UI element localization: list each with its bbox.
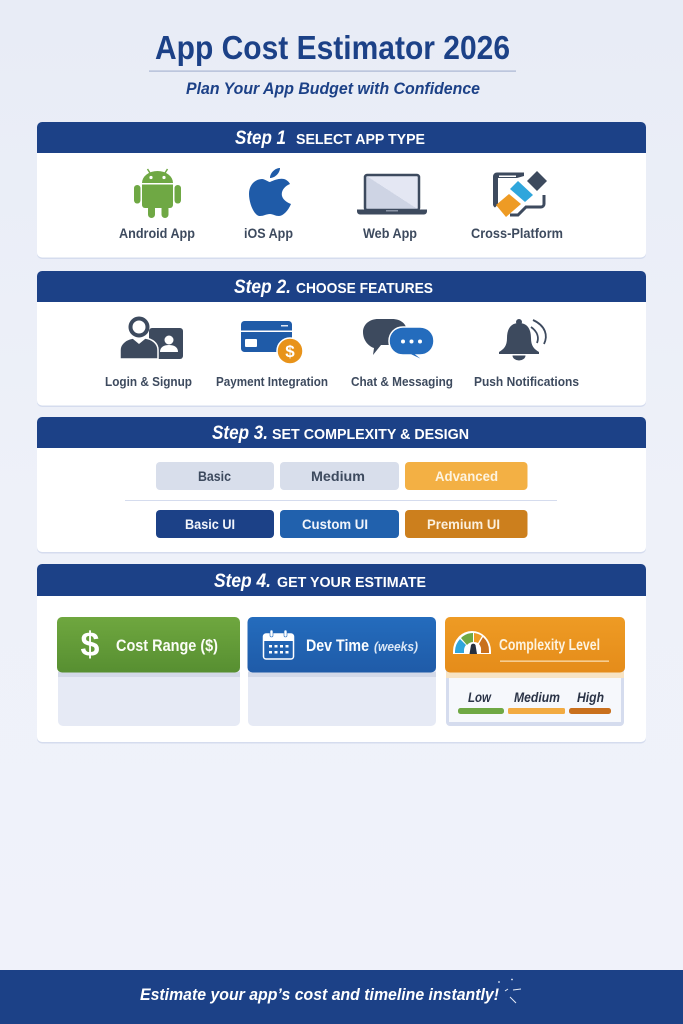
- icon: sparkle: [498, 979, 521, 1003]
- card: complexity level: Complexity Level: [499, 637, 600, 654]
- icon: payment card: [241, 321, 303, 364]
- card: dev time: Dev Time: [306, 636, 369, 655]
- label: ios app: iOS App: [244, 225, 293, 241]
- card: dev time: [248, 617, 436, 726]
- label: web app: Web App: [363, 225, 417, 241]
- icon: apple: [249, 168, 291, 216]
- footer banner: [0, 970, 683, 1024]
- step 4 header: Step 4.: [214, 571, 271, 592]
- step 3 header: Step 3.: [212, 423, 268, 444]
- button: basic ui: [156, 510, 274, 538]
- button: custom ui: Custom UI: [302, 516, 368, 532]
- step 1 header: SELECT APP TYPE: [296, 131, 425, 148]
- icon: calendar: [264, 630, 294, 659]
- icon: login and signup: [120, 318, 183, 359]
- label: payment integration: Payment Integration: [216, 374, 328, 389]
- icon: cross-platform: [493, 171, 547, 217]
- button: custom ui: [280, 510, 399, 538]
- card: cost range: [57, 617, 240, 726]
- step 3 header: [37, 417, 646, 448]
- card: cost range: Cost Range ($): [116, 636, 218, 655]
- card: complexity level: [445, 617, 625, 726]
- step 4 header: [37, 564, 646, 596]
- label: cross-platform: Cross-Platform: [471, 225, 563, 241]
- button: advanced: [405, 462, 528, 490]
- button: medium: [280, 462, 399, 490]
- step 2 header: [37, 271, 646, 302]
- panel: step 1 select app type: [37, 122, 646, 259]
- button: premium ui: [405, 510, 528, 538]
- panel: step 3 complexity and design: [37, 417, 646, 554]
- step 1 header: Step 1: [235, 128, 286, 149]
- card: dev time: (weeks): [374, 639, 418, 654]
- complexity scale: [458, 689, 611, 714]
- button: basic ui: Basic UI: [185, 516, 235, 532]
- subtitle: Plan Your App Budget with Confidence: [186, 79, 480, 98]
- icon: laptop: [357, 175, 427, 214]
- button: basic: [156, 462, 274, 490]
- step 4 header: GET YOUR ESTIMATE: [277, 574, 426, 591]
- step 2 header: Step 2.: [234, 277, 291, 298]
- icon: bell: [499, 319, 546, 360]
- icon: gauge: [453, 631, 491, 654]
- complexity scale: High: [577, 689, 604, 705]
- label: chat and messaging: Chat & Messaging: [351, 374, 453, 389]
- label: android app: Android App: [119, 225, 195, 241]
- card: cost range: $: [81, 626, 100, 664]
- label: login and signup: Login & Signup: [105, 374, 192, 389]
- panel: step 4 get your estimate: [37, 564, 646, 744]
- label: push notifications: Push Notifications: [474, 374, 579, 389]
- complexity scale: Medium: [514, 689, 560, 705]
- button: medium: Medium: [311, 469, 365, 484]
- footer banner: Estimate your app’s cost and timeline instantly!: [140, 985, 499, 1004]
- button: basic: Basic: [198, 468, 231, 484]
- step 1 header: [37, 122, 646, 153]
- button: advanced: Advanced: [435, 468, 498, 484]
- complexity scale: Low: [468, 689, 492, 705]
- panel: step 2 choose features: [37, 271, 646, 407]
- button: premium ui: Premium UI: [427, 516, 500, 532]
- step 3 header: SET COMPLEXITY & DESIGN: [272, 426, 469, 443]
- step 2 header: CHOOSE FEATURES: [296, 280, 433, 297]
- icon: chat bubbles: [363, 319, 434, 362]
- icon: payment card: $: [285, 342, 295, 361]
- title: App Cost Estimator 2026: [155, 29, 510, 66]
- icon: android: [134, 169, 181, 218]
